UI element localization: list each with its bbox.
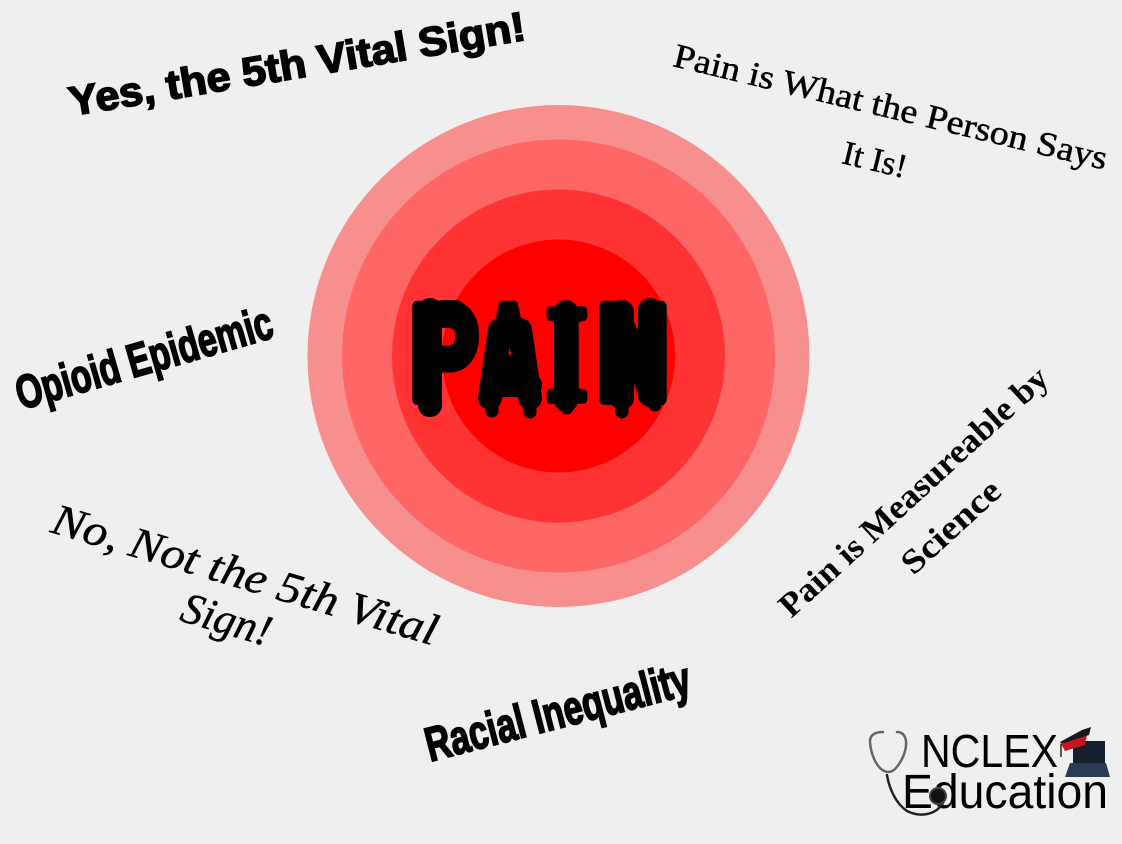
logo: NCLEX Education	[870, 725, 1110, 819]
statement: Pain is What the Person Says It Is: Pain is What the Person Says	[670, 38, 1111, 177]
statement: No, Not the 5th Vital Sign	[32, 494, 444, 701]
icon: stethoscope	[870, 732, 946, 815]
central word: PAIN: N	[597, 279, 669, 428]
central word: PAIN	[410, 279, 669, 428]
logo wordmark: Education	[902, 766, 1108, 819]
concentric pain target	[308, 105, 810, 607]
topic: Racial Inequality: Racial Inequality	[420, 653, 696, 772]
logo wordmark: NCLEX	[921, 725, 1058, 777]
statement: Pain is What the Person Says It Is	[657, 38, 1111, 231]
statement: Pain is Measureable by Science: Science	[894, 472, 1009, 582]
central word: PAIN: P	[410, 279, 478, 428]
central word: PAIN: I	[547, 280, 587, 428]
statement: No, Not the 5th Vital Sign: No, Not the 5th Vital	[45, 494, 444, 655]
statement: Pain is What the Person Says It Is: It Is!	[839, 135, 911, 186]
statement: Pain is Measureable by Science: Pain is Measureable by	[772, 360, 1056, 625]
statement: No, Not the 5th Vital Sign: Sign!	[176, 583, 278, 656]
topic: Opioid Epidemic: Opioid Epidemic	[9, 296, 279, 420]
icon: laptop with graduation cap	[1060, 727, 1110, 777]
heading: Yes, the 5th Vital Sign: Yes, the 5th Vital Sign!	[65, 3, 529, 125]
logo wordmark	[902, 725, 1108, 819]
central word: PAIN: A	[481, 279, 536, 428]
